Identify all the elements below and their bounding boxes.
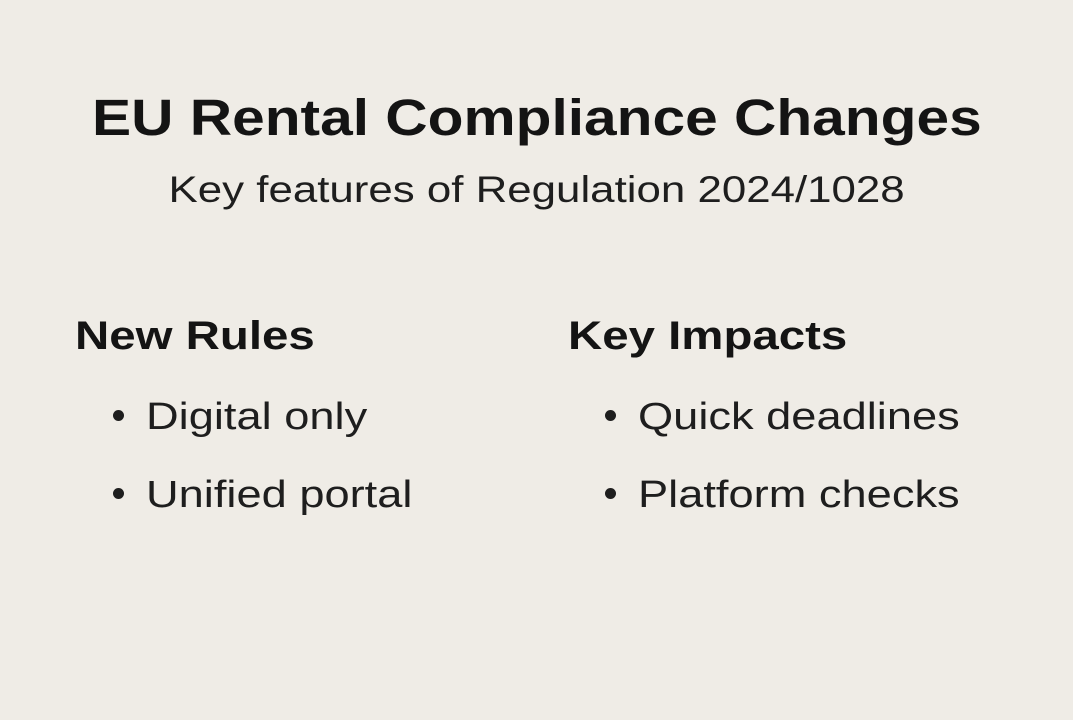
heading: key impacts: Key Impacts (568, 314, 847, 358)
panel: new rules (75, 314, 412, 516)
bullet: platform checks: Platform checks (638, 474, 960, 516)
bullet: digital only: Digital only (146, 396, 367, 438)
title: EU Rental Compliance Changes (92, 89, 981, 146)
heading: new rules: New Rules (75, 314, 315, 358)
subtitle: Key features of Regulation 2024/1028 (168, 169, 905, 210)
bullet: quick deadlines: Quick deadlines (638, 396, 960, 438)
panel: key impacts (568, 314, 960, 516)
bullet: unified portal: Unified portal (146, 474, 412, 516)
